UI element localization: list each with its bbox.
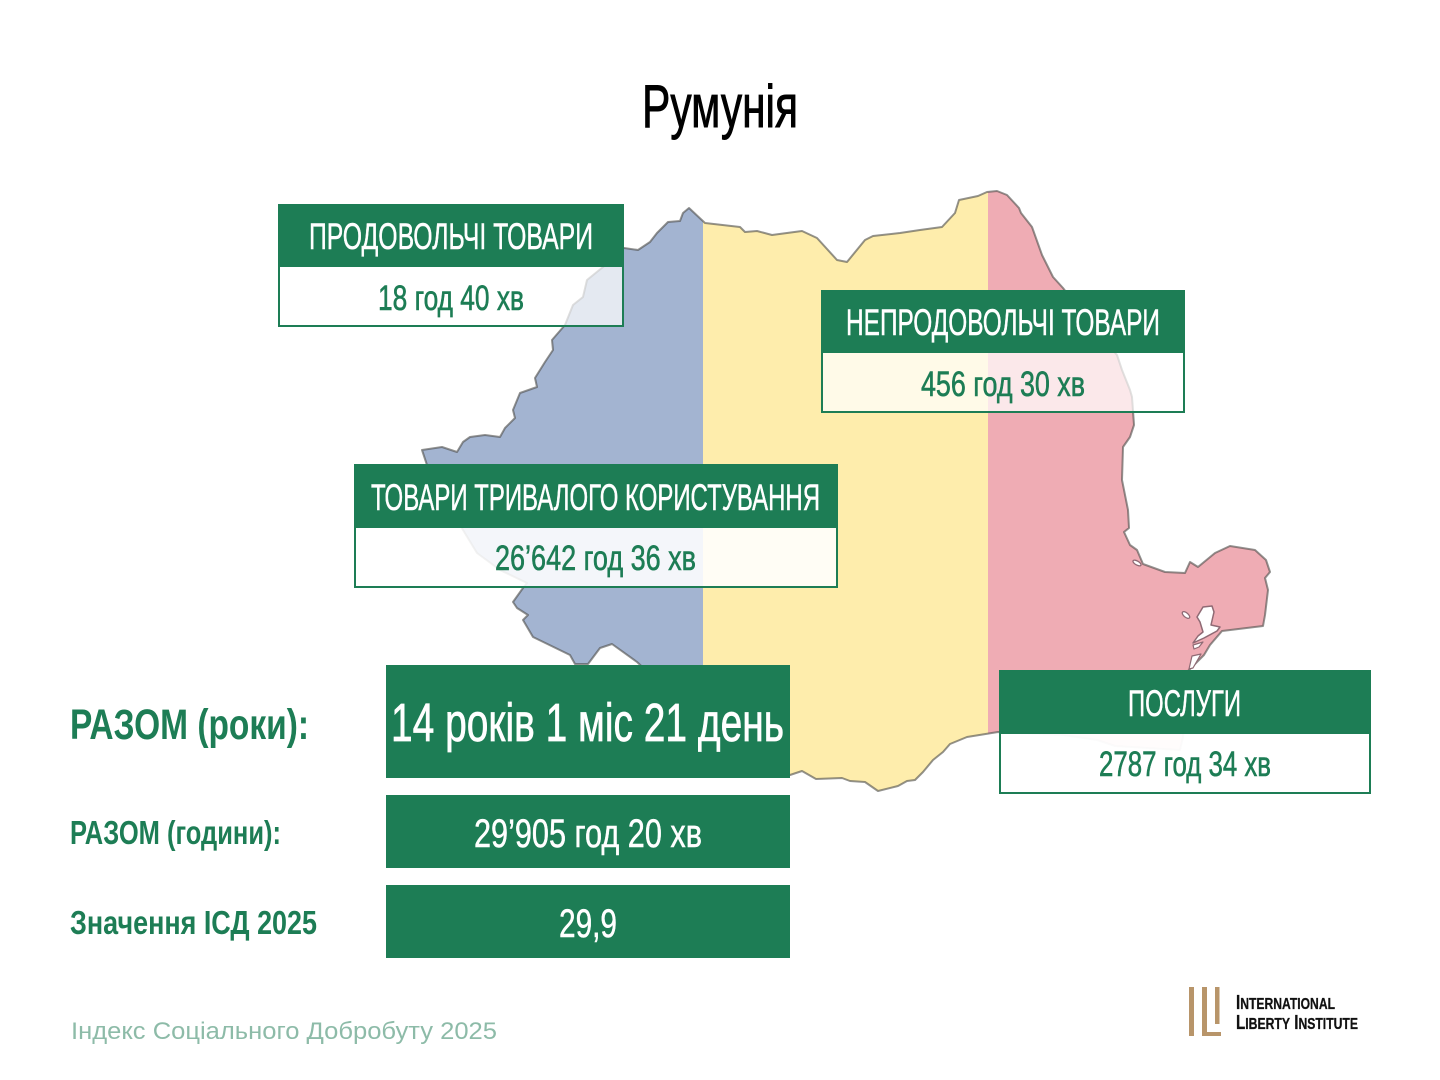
map: Romania with flag colours: [400, 180, 1288, 800]
value: durable goods: 26’642 год 36 хв: [495, 539, 696, 578]
logo: International Liberty Institute: [1189, 987, 1358, 1036]
title: Румунія: [642, 73, 798, 140]
footer text: Індекс Соціального Добробуту 2025: [71, 1018, 497, 1045]
total hours row: [70, 795, 790, 868]
panel: services: [999, 670, 1371, 793]
box: total years: [386, 665, 790, 778]
panel: non-food goods: [821, 290, 1185, 412]
heading: durable goods: ТОВАРИ ТРИВАЛОГО КОРИСТУВАННЯ: [371, 477, 820, 518]
value: non-food goods: 456 год 30 хв: [921, 365, 1085, 404]
total years row: [70, 665, 790, 778]
heading: services: ПОСЛУГИ: [1128, 683, 1241, 724]
logo text line 1: INTERNATIONAL: [1236, 992, 1335, 1014]
index value row: [70, 885, 790, 958]
value: total hours: 29’905 год 20 хв: [474, 812, 702, 856]
value: services: 2787 год 34 хв: [1099, 745, 1271, 784]
label: total hours: РАЗОМ (години):: [70, 814, 281, 851]
logo text line 2: LIBERTY INSTITUTE: [1236, 1012, 1358, 1034]
value: food goods: 18 год 40 хв: [378, 279, 524, 318]
box: total hours: [386, 795, 790, 868]
value: index value: 29,9: [559, 902, 617, 946]
value: total years: 14 років 1 міс 21 день: [391, 693, 784, 753]
box: index value: [386, 885, 790, 958]
panel: durable goods: [354, 464, 838, 587]
panel: food goods: [278, 204, 624, 326]
label: index value: Значення ІСД 2025: [70, 904, 317, 941]
label: total years: РАЗОМ (роки):: [70, 701, 309, 749]
heading: food goods: ПРОДОВОЛЬЧІ ТОВАРИ: [309, 216, 593, 257]
heading: non-food goods: НЕПРОДОВОЛЬЧІ ТОВАРИ: [846, 302, 1160, 343]
icon: logo bars: [1189, 987, 1221, 1036]
